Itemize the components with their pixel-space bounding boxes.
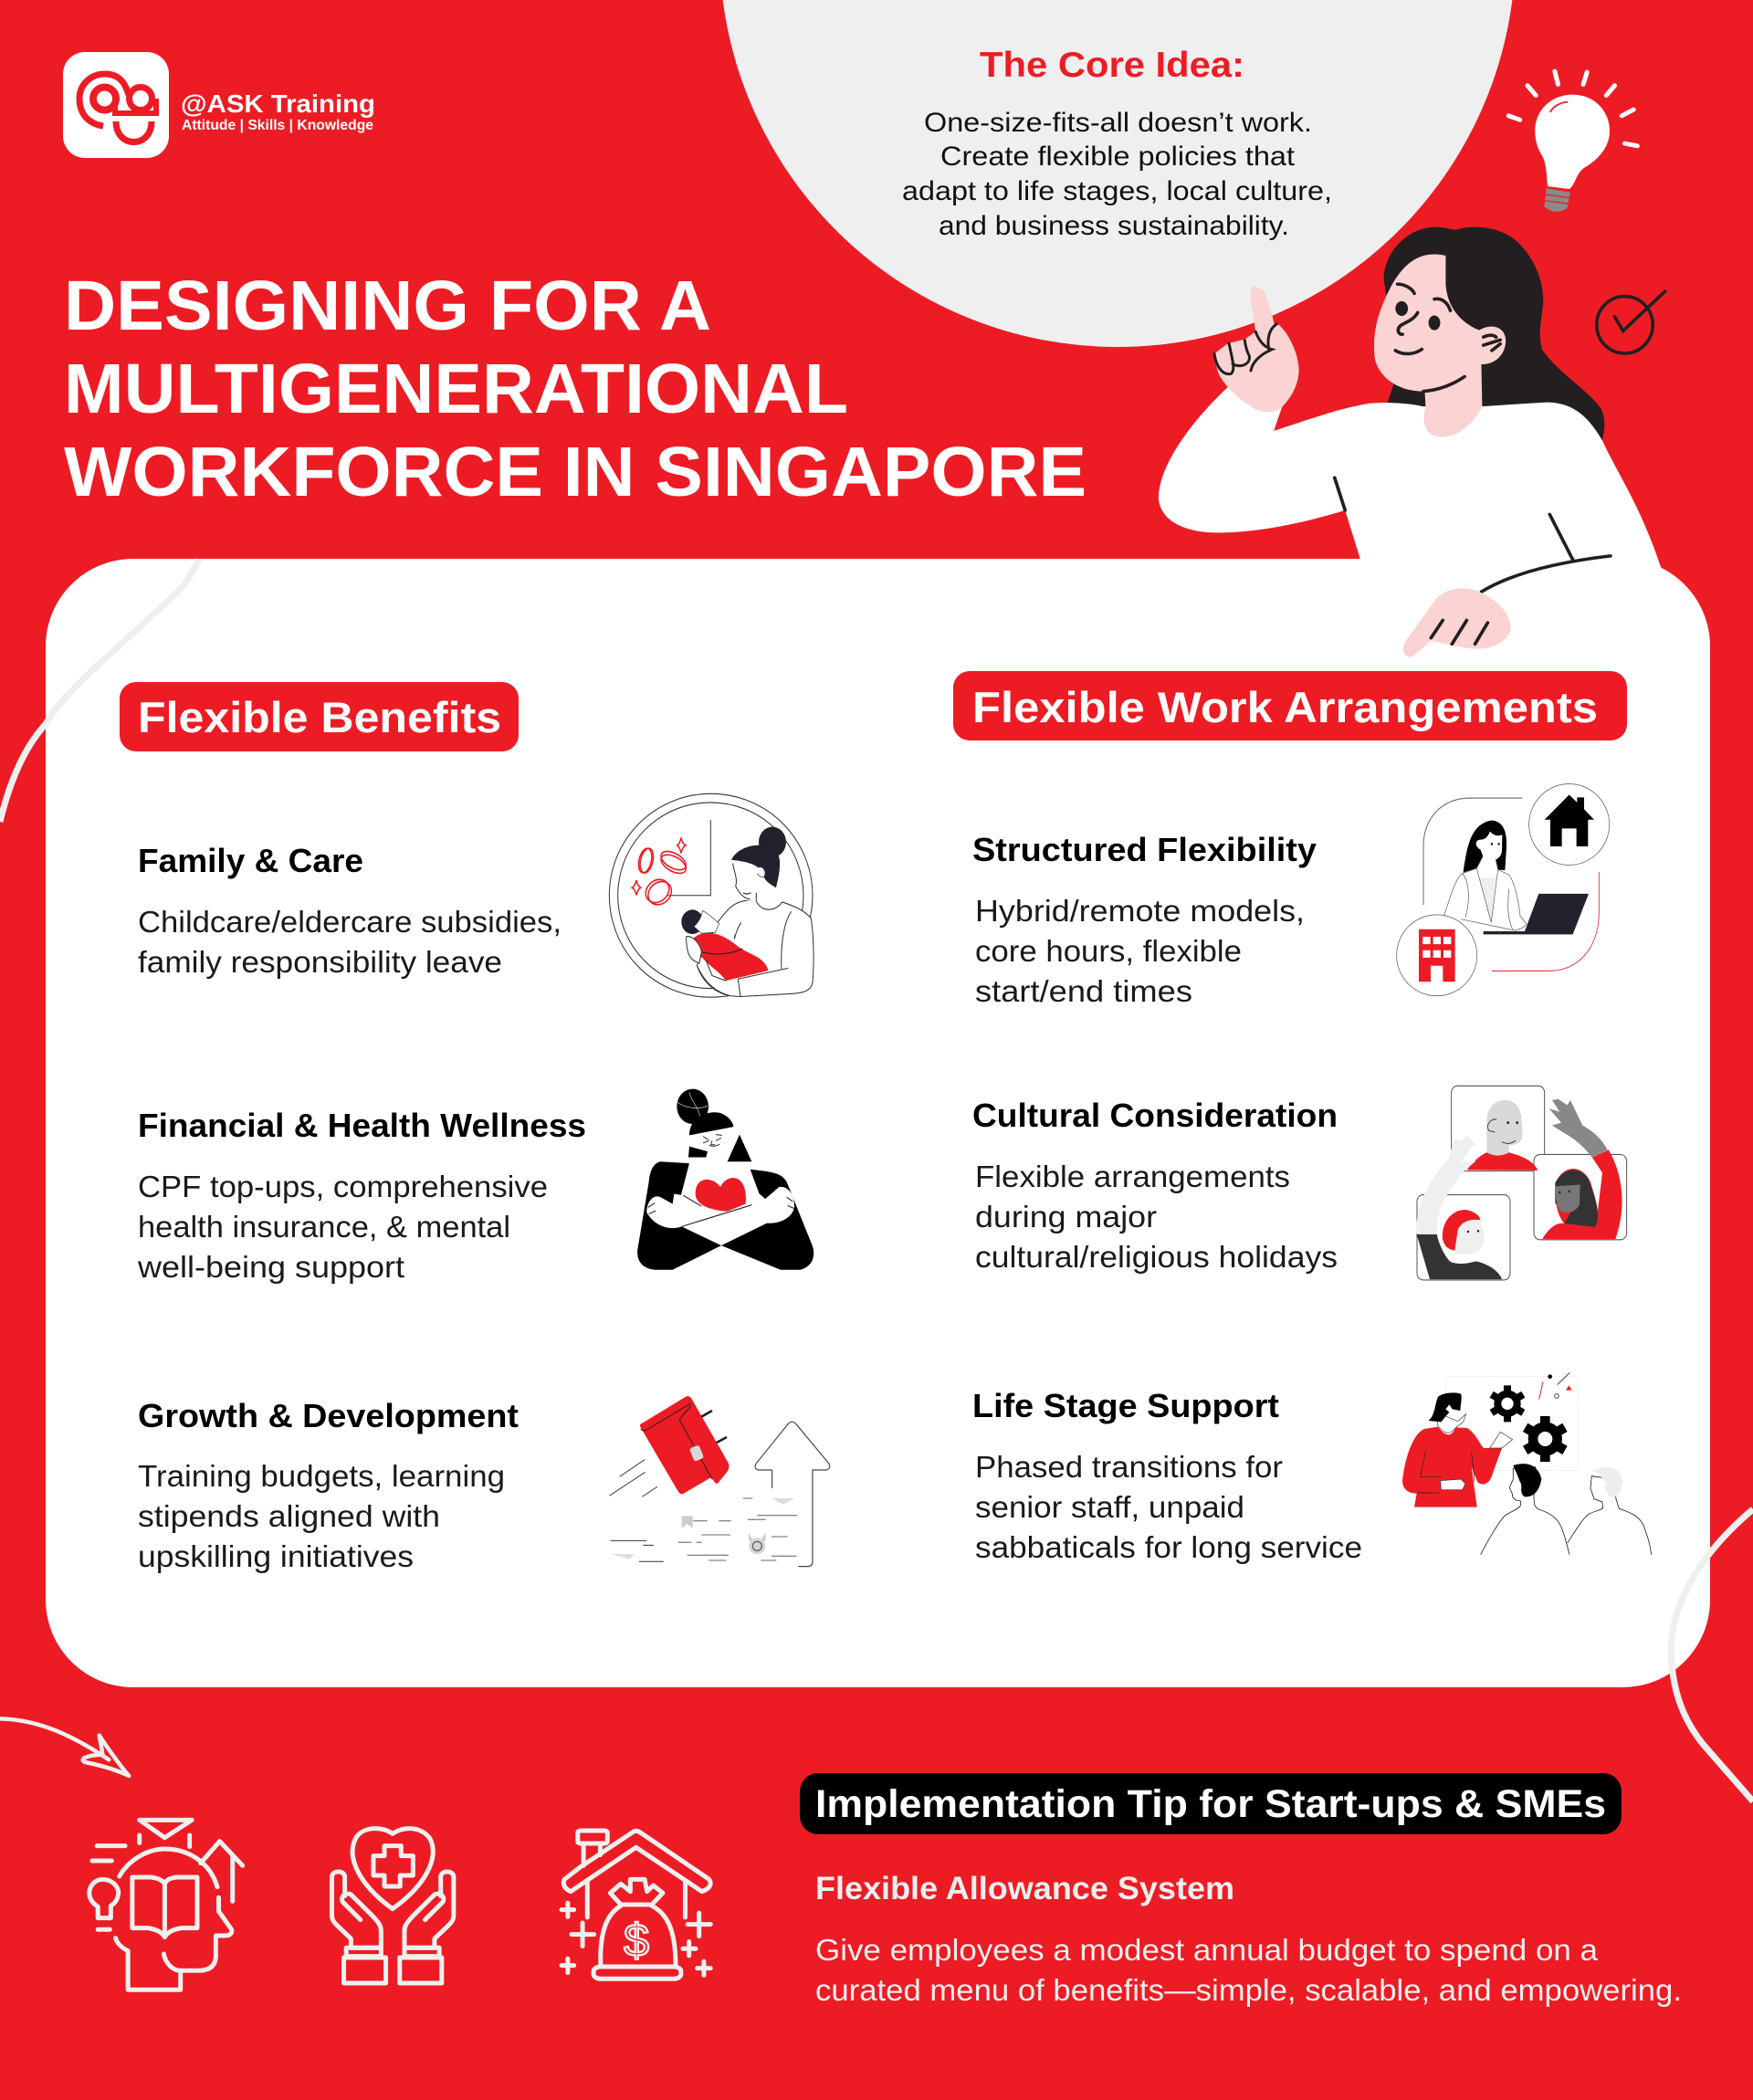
flexible work arrangements heading	[953, 671, 1627, 740]
title	[64, 267, 1086, 511]
flexible benefits heading	[120, 682, 519, 751]
body	[1159, 387, 1666, 625]
life stage support text: sabbaticals for long service	[975, 1530, 1362, 1564]
title: DESIGNING FOR A	[64, 267, 711, 345]
title: WORKFORCE IN SINGAPORE	[64, 433, 1086, 511]
illustration: life stage presenter and gears	[1402, 1372, 1652, 1555]
lower hand	[1403, 588, 1511, 657]
illustration: woman hugging herself with heart	[637, 1089, 814, 1270]
life stage support text	[972, 1387, 1362, 1564]
family and care text	[138, 842, 562, 979]
core idea heading: The Core Idea:	[980, 46, 1244, 85]
flexible work arrangements heading: Flexible Work Arrangements	[972, 683, 1598, 731]
structured flexibility text: Hybrid/remote models,	[975, 894, 1305, 928]
core idea text: Create flexible policies that	[940, 142, 1296, 172]
core idea text	[902, 108, 1332, 241]
cultural consideration text: cultural/religious holidays	[975, 1240, 1338, 1274]
structured flexibility text: start/end times	[975, 974, 1192, 1008]
life stage support text: Phased transitions for	[975, 1450, 1283, 1484]
icon: head with book	[89, 1820, 243, 1990]
icon: house and money bag	[562, 1831, 710, 1979]
growth and development text: Growth & Development	[138, 1397, 519, 1434]
illustration: mother and baby	[609, 793, 814, 997]
growth and development text: upskilling initiatives	[138, 1539, 414, 1573]
illustration: briefcase and growth arrow	[609, 1396, 830, 1567]
face and neck	[1374, 254, 1506, 437]
logo wordmark: @ASK Training	[181, 89, 375, 118]
flexible benefits heading: Flexible Benefits	[138, 693, 501, 741]
structured flexibility text: Structured Flexibility	[972, 831, 1317, 868]
cultural consideration text: during major	[975, 1200, 1157, 1234]
life stage support text: senior staff, unpaid	[975, 1490, 1244, 1524]
cultural consideration text: Flexible arrangements	[975, 1160, 1290, 1193]
financial and health wellness text: well-being support	[137, 1250, 404, 1284]
flexible allowance system description: Give employees a modest annual budget to spend on a	[815, 1933, 1599, 1967]
light bulb	[1508, 71, 1637, 212]
flexible allowance system description	[815, 1933, 1682, 2007]
flexible allowance system description: curated menu of benefits—simple, scalable, and empowering.	[815, 1973, 1682, 2007]
family and care text: Family & Care	[138, 842, 363, 879]
curved arrow	[0, 1718, 129, 1776]
flexible allowance system subheading: Flexible Allowance System	[815, 1871, 1234, 1906]
illustration: cultural video call	[1416, 1086, 1627, 1280]
structured flexibility text	[972, 831, 1317, 1008]
raised hand	[1214, 286, 1299, 412]
logo	[63, 52, 169, 158]
title: MULTIGENERATIONAL	[64, 350, 848, 428]
growth and development text: Training budgets, learning	[138, 1459, 505, 1493]
growth and development text: stipends aligned with	[138, 1499, 440, 1533]
check icon	[1597, 291, 1665, 353]
white content card	[46, 559, 1710, 1687]
back hair	[1383, 227, 1604, 441]
financial and health wellness text: health insurance, & mental	[138, 1210, 510, 1244]
family and care text: Childcare/eldercare subsidies,	[138, 905, 562, 939]
financial and health wellness text: CPF top-ups, comprehensive	[138, 1170, 548, 1203]
growth and development text	[138, 1397, 519, 1573]
financial and health wellness text	[137, 1107, 586, 1284]
face details	[1335, 284, 1611, 592]
icon: house and money bag: $	[624, 1915, 649, 1966]
core idea text: One-size-fits-all doesn’t work.	[924, 108, 1312, 138]
implementation tip heading: Implementation Tip for Start-ups & SMEs	[815, 1782, 1606, 1826]
core idea text: adapt to life stages, local culture,	[902, 176, 1332, 206]
core idea circle	[719, 0, 1516, 347]
structured flexibility text: core hours, flexible	[975, 934, 1242, 968]
life stage support text: Life Stage Support	[972, 1387, 1279, 1424]
logo tagline: Attitude | Skills | Knowledge	[182, 118, 373, 133]
cultural consideration text	[972, 1097, 1338, 1274]
financial and health wellness text: Financial & Health Wellness	[138, 1107, 586, 1144]
family and care text: family responsibility leave	[138, 945, 502, 979]
cultural consideration text: Cultural Consideration	[972, 1097, 1338, 1134]
icon: hands holding heart with cross	[331, 1829, 454, 1983]
woman pointing illustration	[1159, 71, 1666, 657]
illustration: hybrid work	[1397, 784, 1610, 996]
core idea text: and business sustainability.	[939, 211, 1289, 241]
implementation tip heading	[800, 1773, 1622, 1834]
